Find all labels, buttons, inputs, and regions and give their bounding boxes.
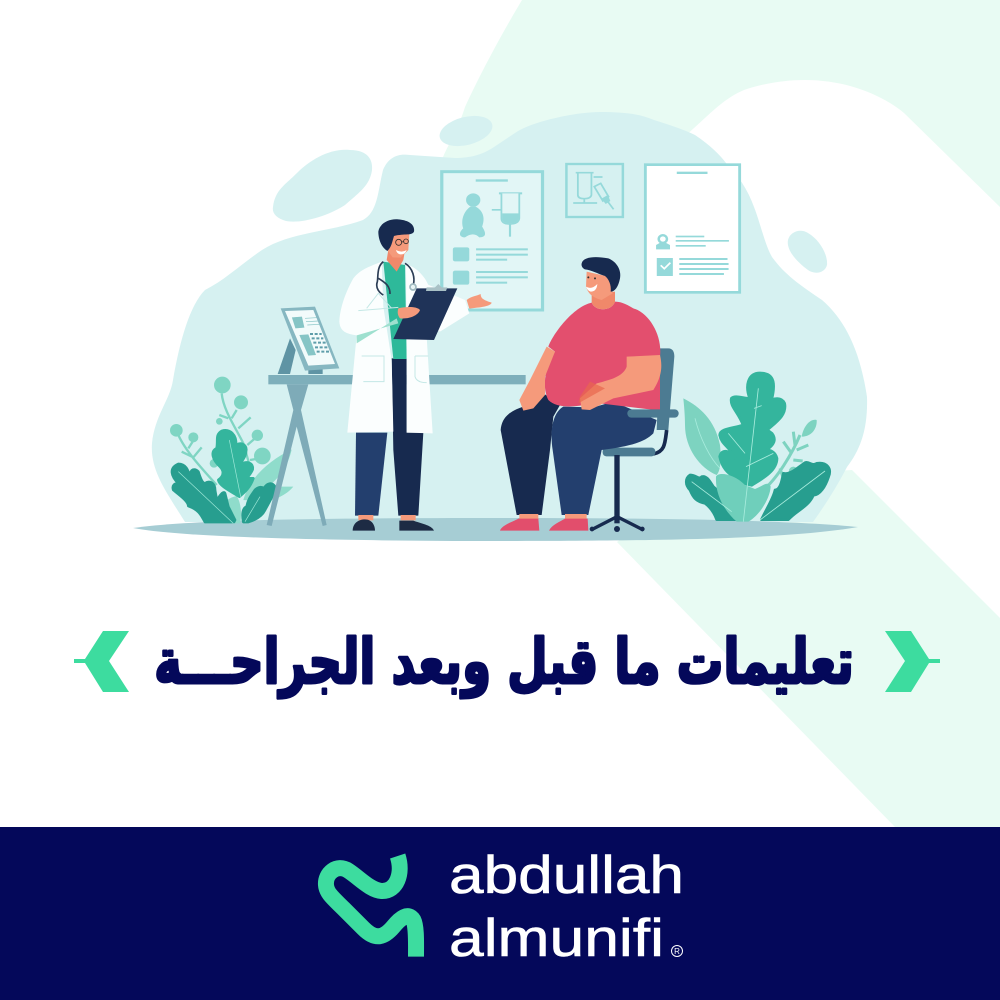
- logo mark: [326, 856, 416, 957]
- title chevron left: [74, 631, 129, 692]
- shirt: [545, 302, 660, 411]
- poster: patient record: [645, 165, 740, 292]
- registered mark: R: [674, 947, 680, 956]
- hands: [398, 294, 492, 318]
- chair: [590, 348, 674, 532]
- dark leaf left: [686, 475, 739, 520]
- right plant: [683, 373, 830, 522]
- trousers: [501, 394, 657, 515]
- poster: infusion and patient chart: [442, 172, 542, 310]
- floating blob left: [273, 150, 372, 222]
- wordmark: [449, 846, 684, 968]
- registered mark: [672, 946, 682, 956]
- trousers: [355, 358, 423, 516]
- dark leaf right: [761, 462, 830, 520]
- tall central leaf: [720, 373, 785, 485]
- desk, monitor and doctor: [267, 219, 526, 531]
- feet and shoes: [500, 514, 588, 531]
- background mint shapes: [442, 0, 1000, 827]
- armrest: [627, 409, 679, 418]
- clipboard: [393, 284, 457, 340]
- wordmark: abdullah: [449, 846, 684, 905]
- ankles and shoes: [353, 515, 434, 531]
- ground shadow: [133, 518, 858, 541]
- logo: [326, 846, 684, 968]
- central leaf: [213, 430, 253, 497]
- doctor: [339, 219, 492, 531]
- footer band: [0, 827, 1000, 1000]
- wall posters: [442, 164, 740, 310]
- floating blob right: [788, 231, 827, 273]
- head: [582, 257, 620, 309]
- seated patient on chair: [500, 257, 679, 532]
- scrub top: [383, 262, 407, 359]
- wordmark: almunifi: [449, 909, 664, 968]
- pale tall leaf: [683, 398, 721, 475]
- left plant: [170, 377, 293, 523]
- monitor: [278, 307, 339, 374]
- title text: تعليمات ما قبل وبعد الجراحـــة: [154, 625, 854, 699]
- title chevron right: [885, 631, 940, 692]
- stethoscope: [377, 262, 416, 295]
- berry sprig: [765, 420, 817, 488]
- desk: [267, 375, 526, 526]
- head: [378, 219, 414, 272]
- lab coat: [339, 262, 469, 433]
- dark leaf left: [172, 464, 235, 522]
- pale front leaf: [716, 474, 771, 522]
- dark leaf right: [243, 484, 275, 522]
- floating blob top: [436, 111, 496, 151]
- poster: drip and syringe: [566, 164, 623, 217]
- berry sprigs: [170, 377, 271, 485]
- illustration backdrop blob: [152, 111, 867, 522]
- arms: [519, 347, 661, 411]
- pale leaf: [221, 449, 293, 523]
